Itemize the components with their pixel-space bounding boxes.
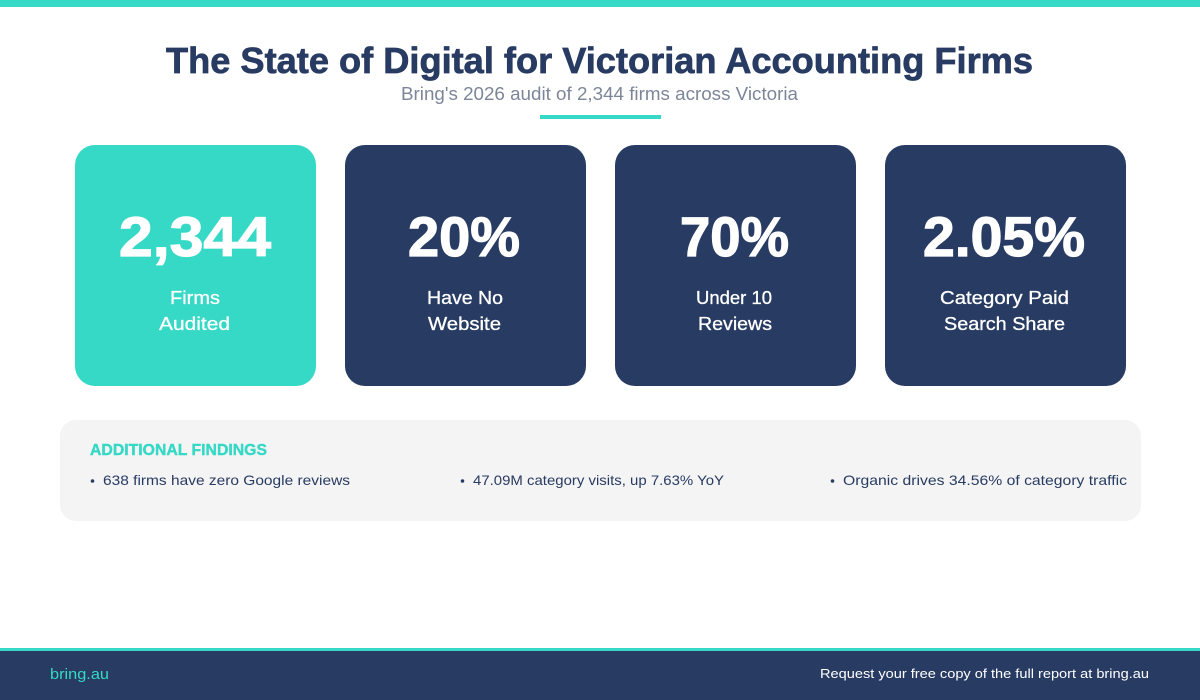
stat: 70%: 70% <box>680 205 789 268</box>
label: category paid search share <box>940 288 1069 334</box>
subtitle: Bring's 2026 audit of 2,344 firms across Victoria <box>401 84 799 104</box>
label: have no website: Website <box>428 314 501 334</box>
panel: under 10 reviews <box>615 145 856 386</box>
label: have no website <box>427 288 503 334</box>
panel: category paid search share <box>885 145 1126 386</box>
stat: 2,344: 2,344 <box>119 205 271 268</box>
label: under 10 reviews: Under 10 <box>696 288 772 308</box>
title underline <box>540 115 661 119</box>
findings heading: ADDITIONAL FINDINGS <box>90 442 267 459</box>
top accent bar <box>0 0 1200 7</box>
label: firms audited <box>159 288 230 334</box>
panel: additional findings <box>60 420 1141 521</box>
label: under 10 reviews <box>696 288 772 334</box>
finding: organic traffic: Organic drives 34.56% of category traffic <box>843 472 1127 488</box>
panel: no website <box>345 145 586 386</box>
panel: firms audited <box>75 145 316 386</box>
label: firms audited: Firms <box>170 288 220 308</box>
title: The State of Digital for Victorian Accounting Firms <box>166 40 1033 81</box>
footer call to action: Request your free copy of the full report at bring.au <box>820 666 1149 681</box>
stat: 2.05%: 2.05% <box>923 205 1085 268</box>
label: have no website: Have No <box>427 288 503 308</box>
finding: category visits: 47.09M category visits, up 7.63% YoY <box>473 472 725 488</box>
stat: 20%: 20% <box>408 205 520 268</box>
finding: zero reviews: 638 firms have zero Google reviews <box>103 472 350 488</box>
label: category paid search share: Search Share <box>944 314 1065 334</box>
label: under 10 reviews: Reviews <box>698 314 772 334</box>
label: category paid search share: Category Paid <box>940 288 1069 308</box>
footer brand: bring.au <box>50 666 109 683</box>
footer <box>0 648 1200 700</box>
label: firms audited: Audited <box>159 314 230 334</box>
